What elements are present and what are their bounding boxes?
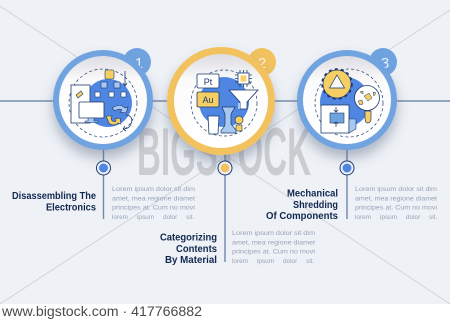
step 2 connector: [224, 145, 226, 262]
step 2 text block: amet, mea regione diamet: [232, 239, 315, 246]
step 3 number badge: 3: [381, 55, 389, 72]
step 1 text block: Lorem ipsum dolor sit dim: [112, 186, 195, 193]
step 1 text block: dolor: [163, 214, 178, 221]
step 2 circle: [167, 47, 275, 155]
icon: categorizing materials: Au: [202, 95, 214, 105]
step 1 text block: ipsum: [137, 214, 154, 221]
step 3 text block: amet, mea regione diamet: [355, 195, 437, 202]
step 3 heading: Mechanical: [287, 189, 338, 200]
step 2 number badge: 2: [258, 55, 266, 72]
step 3 text block: lorem: [355, 214, 371, 221]
step 2 text block: sit.: [306, 258, 314, 265]
step 1 timeline dot: [96, 161, 110, 175]
step 1 text block: amet, mea regione diamet: [112, 195, 195, 202]
step 1 heading: [12, 191, 96, 214]
step 2 text block: principes at. Cum no movi: [232, 248, 315, 256]
footer source text: www.bigstock.com · 417766882: [1, 304, 202, 319]
step 1 connector: [102, 140, 104, 219]
icon: categorizing materials: [191, 70, 258, 136]
step 3 text block: principes at. Cum no movi: [355, 204, 437, 212]
step 2 heading: [160, 232, 217, 266]
step 2: [160, 47, 315, 266]
step 2 heading: Categorizing: [160, 232, 217, 244]
step 1 heading: Electronics: [46, 202, 96, 214]
step 1 circle: [53, 50, 153, 150]
step 3 connector: [346, 140, 348, 219]
horizontal timeline: [0, 100, 450, 102]
step 3 text block: [355, 186, 437, 221]
step 3 timeline dot: [340, 161, 354, 175]
step 3 text block: ipsum: [380, 214, 397, 221]
step 2 text block: lorem: [232, 258, 248, 265]
step 3 circle: [297, 50, 397, 150]
step 1 text block: [112, 186, 195, 221]
step 1 number badge: 1: [135, 55, 143, 72]
step 3 text block: dolor: [406, 214, 421, 221]
step 2 number badge: [248, 48, 276, 76]
step 1 text block: principes at. Cum no movi: [112, 204, 195, 212]
step 2 text block: [232, 230, 315, 265]
step 3 heading: Shredding: [293, 200, 338, 211]
step 3 text block: sit.: [429, 214, 437, 221]
step 3 heading: Of Components: [266, 211, 338, 222]
step 3 text block: Lorem ipsum dolor sit dim: [355, 186, 437, 193]
step 1 heading: Disassembling The: [12, 191, 96, 202]
icon: mechanical shredding: [315, 69, 383, 137]
icon: categorizing materials: Pt: [204, 77, 213, 87]
step 2 heading: Contents: [176, 244, 217, 255]
step 2 text block: ipsum: [257, 258, 274, 265]
step 3: [266, 48, 437, 222]
step 1: [12, 48, 195, 221]
step 3 heading: [266, 189, 338, 222]
step 2 heading: By Material: [165, 255, 217, 266]
step 3 number badge: [369, 48, 397, 76]
step 1 text block: sit.: [186, 214, 194, 221]
step 2 text block: dolor: [283, 258, 298, 265]
step 1 text block: lorem: [112, 214, 128, 221]
step 1 number badge: [123, 48, 151, 76]
step 2 text block: Lorem ipsum dolor sit dim: [232, 230, 315, 237]
icon: disassembling electronics: [69, 69, 137, 137]
step 2 timeline dot: [218, 161, 232, 175]
